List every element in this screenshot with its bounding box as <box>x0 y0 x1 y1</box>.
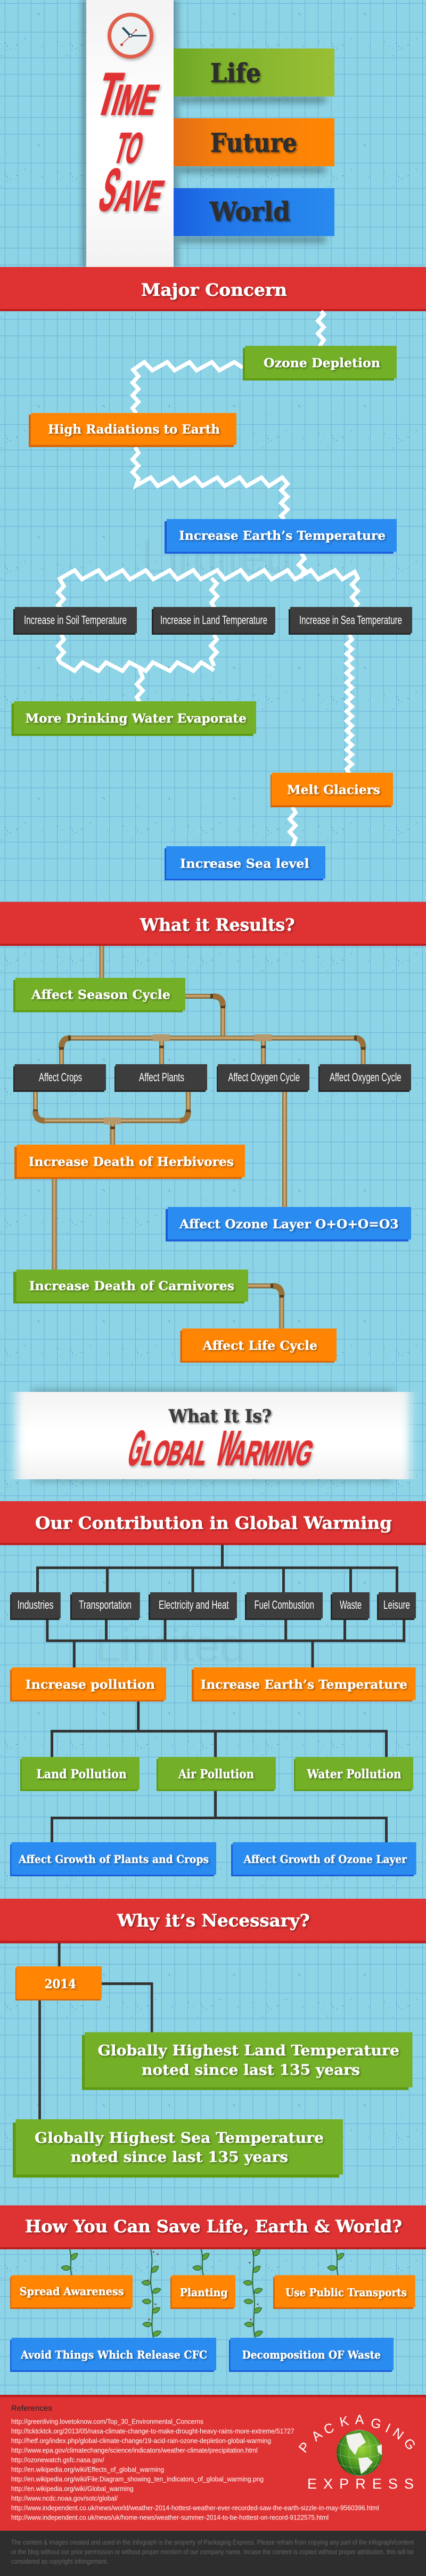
box: Globally Highest Land Temperature <box>82 2032 412 2090</box>
panel: references footer <box>0 2395 426 2531</box>
box: Affect Life Cycle <box>180 1328 337 1363</box>
title: Time to Save <box>89 61 169 224</box>
box: Ozone Depletion: Ozone Depletion <box>264 355 380 370</box>
box: Decomposition OF Waste <box>229 2338 394 2372</box>
box: Affect Growth of Ozone Layer <box>231 1842 416 1876</box>
heading: How You Can Save Life, Earth & World?: How You Can Save Life, Earth & World? <box>25 2216 402 2237</box>
box: Ozone Depletion <box>243 346 397 380</box>
reference links: http://www.independent.co.uk/news/world/weather-2014-hottest-weather-ever-recorded-saw-the-earth-sizzle-in-may-9560396.html <box>11 2504 379 2512</box>
box: Increase pollution <box>10 1667 166 1702</box>
panel: copyright footer <box>0 2531 426 2576</box>
box: Globally Highest Sea Temperature: noted since last 135 years <box>71 2149 288 2166</box>
box: Avoid Things Which Release CFC: Avoid Things Which Release CFC <box>20 2348 207 2361</box>
box: Water Pollution <box>294 1757 413 1791</box>
box: Affect Plants: Affect Plants <box>139 1071 184 1084</box>
title: Global Warming: ARMING <box>227 1434 318 1472</box>
box: Melt Glaciers <box>271 773 393 807</box>
box: Industries: Industries <box>18 1598 54 1611</box>
title: Time to Save: AVE <box>110 172 169 220</box>
box: Increase Death of Herbivores: Increase Death of Herbivores <box>29 1154 234 1169</box>
reference links: http://www.epa.gov/climatechange/science/indicators/weather-climate/precipitation.html <box>11 2447 258 2454</box>
watermark: Limited <box>95 2447 246 2500</box>
box: Use Public Transports: Use Public Transports <box>285 2286 407 2299</box>
box: Avoid Things Which Release CFC <box>10 2338 216 2372</box>
heading: Our Contribution in Global Warming <box>0 1501 426 1545</box>
box: More Drinking Water Evaporate: More Drinking Water Evaporate <box>26 711 247 726</box>
box: Affect Ozone Layer: Affect Ozone Layer O+O+O=O3 <box>179 1217 398 1232</box>
logo text: Packaging: K <box>338 2413 350 2430</box>
box: Increase in Soil Temperature: Increase in Soil Temperature <box>24 613 127 627</box>
logo text: Packaging: G <box>400 2435 419 2453</box>
heading: What it Results? <box>0 902 426 946</box>
title bar: Future: Future <box>210 127 297 158</box>
box: Air Pollution: Air Pollution <box>178 1767 254 1781</box>
box: Use Public Transports <box>273 2275 415 2309</box>
box: Increase in Land Temperature <box>152 607 275 635</box>
box: Transportation <box>70 1592 140 1620</box>
box: Affect Oxygen Cycle 2 <box>318 1064 411 1092</box>
box: Increase Earth's Temperature: Increase Earth’s Temperature <box>200 1677 407 1692</box>
box: Fuel Combustion: Fuel Combustion <box>255 1598 314 1611</box>
box: Affect Growth of Plants and Crops <box>10 1842 216 1876</box>
reference links: http://greenliving.lovetoknow.com/Top_30_Environmental_Concerns <box>11 2418 203 2425</box>
title bar: World <box>174 188 334 242</box>
panel: What It Is? Global Warming <box>16 1388 410 1482</box>
reference links: http://tcktcktck.org/2013/05/nasa-climate-change-to-make-drought-heavy-rains-more-extreme/51727 <box>11 2427 294 2435</box>
box: Affect Crops <box>13 1064 106 1092</box>
title bar: Life: Life <box>210 58 261 88</box>
title: Global Warming: G <box>122 1421 151 1476</box>
box: Increase Earth's Temperature <box>165 519 397 554</box>
heading: Why it's Necessary?: Why it’s Necessary? <box>117 1910 310 1931</box>
section: contribution flow <box>10 1545 416 1876</box>
box: Affect Growth of Plants and Crops: Affect Growth of Plants and Crops <box>18 1853 209 1866</box>
box: Affect Season Cycle: Affect Season Cycle <box>31 987 170 1002</box>
icon: clock <box>108 13 153 59</box>
box: Melt Glaciers: Melt Glaciers <box>287 782 380 797</box>
box: More Drinking Water Evaporate <box>12 701 256 736</box>
reference links: http://en.wikipedia.org/wiki/Effects_of_global_warming <box>11 2466 164 2473</box>
box: High Radiations to Earth <box>29 413 236 447</box>
box: Electricity and Heat: Electricity and Heat <box>159 1598 229 1611</box>
title: Global Warming: W <box>211 1421 244 1476</box>
logo text: Packaging: A <box>355 2412 364 2427</box>
box: Increase Death of Carnivores: Increase Death of Carnivores <box>29 1278 234 1293</box>
icon: globe <box>337 2430 382 2476</box>
box: Increase pollution: Increase pollution <box>26 1677 155 1692</box>
connector lines <box>36 1545 405 1842</box>
box: Affect Ozone Layer <box>166 1207 411 1242</box>
box: Increase Death of Herbivores <box>14 1145 245 1179</box>
box: Affect Crops: Affect Crops <box>39 1071 82 1084</box>
box: Decomposition OF Waste: Decomposition OF Waste <box>242 2348 381 2361</box>
zigzag connectors <box>58 311 358 847</box>
watermark: Limited <box>95 1619 246 1672</box>
box: Increase Sea level: Increase Sea level <box>180 856 309 871</box>
logo text: Packaging: C <box>322 2420 337 2437</box>
watermark <box>95 59 292 2500</box>
box: 2014 <box>15 1966 102 2000</box>
reference links: http://hetf.org/index.php/global-climate-change/19-acid-rain-ozone-depletion-global-warming <box>11 2437 271 2444</box>
box: Increase in Land Temperature: Increase in Land Temperature <box>160 613 267 627</box>
box: Industries <box>10 1592 61 1620</box>
box: Globally Highest Sea Temperature: Globally Highest Sea Temperature <box>35 2129 324 2146</box>
reference links: http://www.independent.co.uk/news/uk/home-news/weather-summer-2014-to-be-hottest-on-record-9122575.html <box>11 2514 329 2521</box>
title: Global Warming <box>122 1421 318 1476</box>
logo text: Packaging: P <box>296 2439 313 2456</box>
box: Globally Highest Sea Temperature <box>13 2119 343 2177</box>
title: Time to Save: T <box>89 61 129 128</box>
reference links: http://en.wikipedia.org/wiki/File:Diagram_showing_ten_indicators_of_global_warming.png <box>11 2475 264 2483</box>
box: Fuel Combustion <box>245 1592 323 1620</box>
section: why necessary <box>13 1943 412 2177</box>
box: Waste <box>331 1592 370 1620</box>
box: Land Pollution <box>20 1757 140 1791</box>
box: Globally Highest Land Temperature: noted since last 135 years <box>142 2061 360 2078</box>
box: Land Pollution: Land Pollution <box>36 1767 127 1781</box>
connector lines <box>38 1943 153 2119</box>
watermark: Limited <box>141 59 292 111</box>
box: Increase Earth's Temperature <box>192 1667 416 1702</box>
heading: How You Can Save Life, Earth & World? <box>0 2205 426 2249</box>
box: 2014: 2014 <box>45 1976 76 1991</box>
logo text: Packaging: N <box>390 2425 406 2443</box>
reference links: http://en.wikipedia.org/wiki/Global_warming <box>11 2485 134 2492</box>
heading: References: References <box>11 2404 52 2413</box>
box: Leisure: Leisure <box>383 1598 410 1611</box>
box: Affect Season Cycle <box>13 978 185 1012</box>
logo text: Packaging <box>296 2412 419 2456</box>
heading: What it Results?: What it Results? <box>140 914 295 935</box>
title bar: Future <box>174 118 334 173</box>
box: Affect Oxygen Cycle: Affect Oxygen Cycle <box>228 1071 300 1084</box>
heading: Major Concern: Major Concern <box>141 280 287 300</box>
title bar: Life <box>174 48 334 103</box>
title bar: World: World <box>209 196 290 227</box>
box: Water Pollution: Water Pollution <box>307 1767 402 1781</box>
box: Planting <box>170 2275 235 2309</box>
box: Increase in Sea Temperature <box>289 607 412 635</box>
box: Leisure <box>377 1592 416 1620</box>
section: how to save <box>10 2248 415 2372</box>
pipes <box>33 946 365 1328</box>
box: Planting: Planting <box>180 2286 228 2299</box>
box: Transportation: Transportation <box>79 1598 132 1611</box>
box: Affect Growth of Ozone Layer: Affect Growth of Ozone Layer <box>243 1853 407 1866</box>
box: Affect Life Cycle: Affect Life Cycle <box>202 1338 317 1353</box>
box: Increase Death of Carnivores <box>13 1269 248 1303</box>
logo text: Express: EXPRESS <box>307 2476 414 2492</box>
box: Increase Earth's Temperature: Increase Earth’s Temperature <box>179 528 386 543</box>
box: Increase Sea level <box>165 846 325 880</box>
panel: copyright footer: considered as copyright infringement. <box>11 2558 108 2565</box>
heading: What It Is?: What It Is? <box>168 1406 272 1427</box>
watermark: Limited <box>141 530 292 583</box>
box: Affect Oxygen Cycle <box>217 1064 309 1092</box>
heading: Our Contribution in Global Warming: Our Contribution in Global Warming <box>35 1513 392 1533</box>
logo: Packaging Express <box>296 2412 419 2492</box>
reference links: http://ozonewatch.gsfc.nasa.gov/ <box>11 2456 104 2464</box>
reference links <box>11 2418 379 2521</box>
box: Increase in Soil Temperature <box>13 607 137 635</box>
vines <box>61 2248 346 2338</box>
box: Electricity and Heat <box>149 1592 237 1620</box>
box: Waste: Waste <box>340 1598 362 1611</box>
reference links: http://www.ncdc.noaa.gov/sotc/global/ <box>11 2494 118 2502</box>
title: Time to Save: S <box>93 157 127 224</box>
title: Global Warming: LOBAL <box>137 1434 213 1472</box>
section: major concern flow <box>12 311 412 880</box>
box: Air Pollution <box>157 1757 276 1791</box>
box: Spread Awareness <box>10 2275 133 2309</box>
logo text: Packaging: G <box>369 2415 383 2432</box>
title: Time to Save: IME <box>107 76 164 124</box>
logo text: Packaging: A <box>309 2427 325 2444</box>
box: Spread Awareness: Spread Awareness <box>20 2285 124 2298</box>
box: Affect Plants <box>114 1064 207 1092</box>
title: Time to Save: TO <box>110 124 149 172</box>
section: results flow <box>13 946 411 1363</box>
box: High Radiations to Earth: High Radiations to Earth <box>48 422 220 437</box>
panel: title column <box>81 0 179 267</box>
heading: Major Concern <box>0 267 426 311</box>
box: Globally Highest Land Temperature: Globally Highest Land Temperature <box>98 2042 399 2059</box>
heading: Why it's Necessary? <box>0 1899 426 1943</box>
logo text: Packaging: I <box>383 2421 392 2436</box>
